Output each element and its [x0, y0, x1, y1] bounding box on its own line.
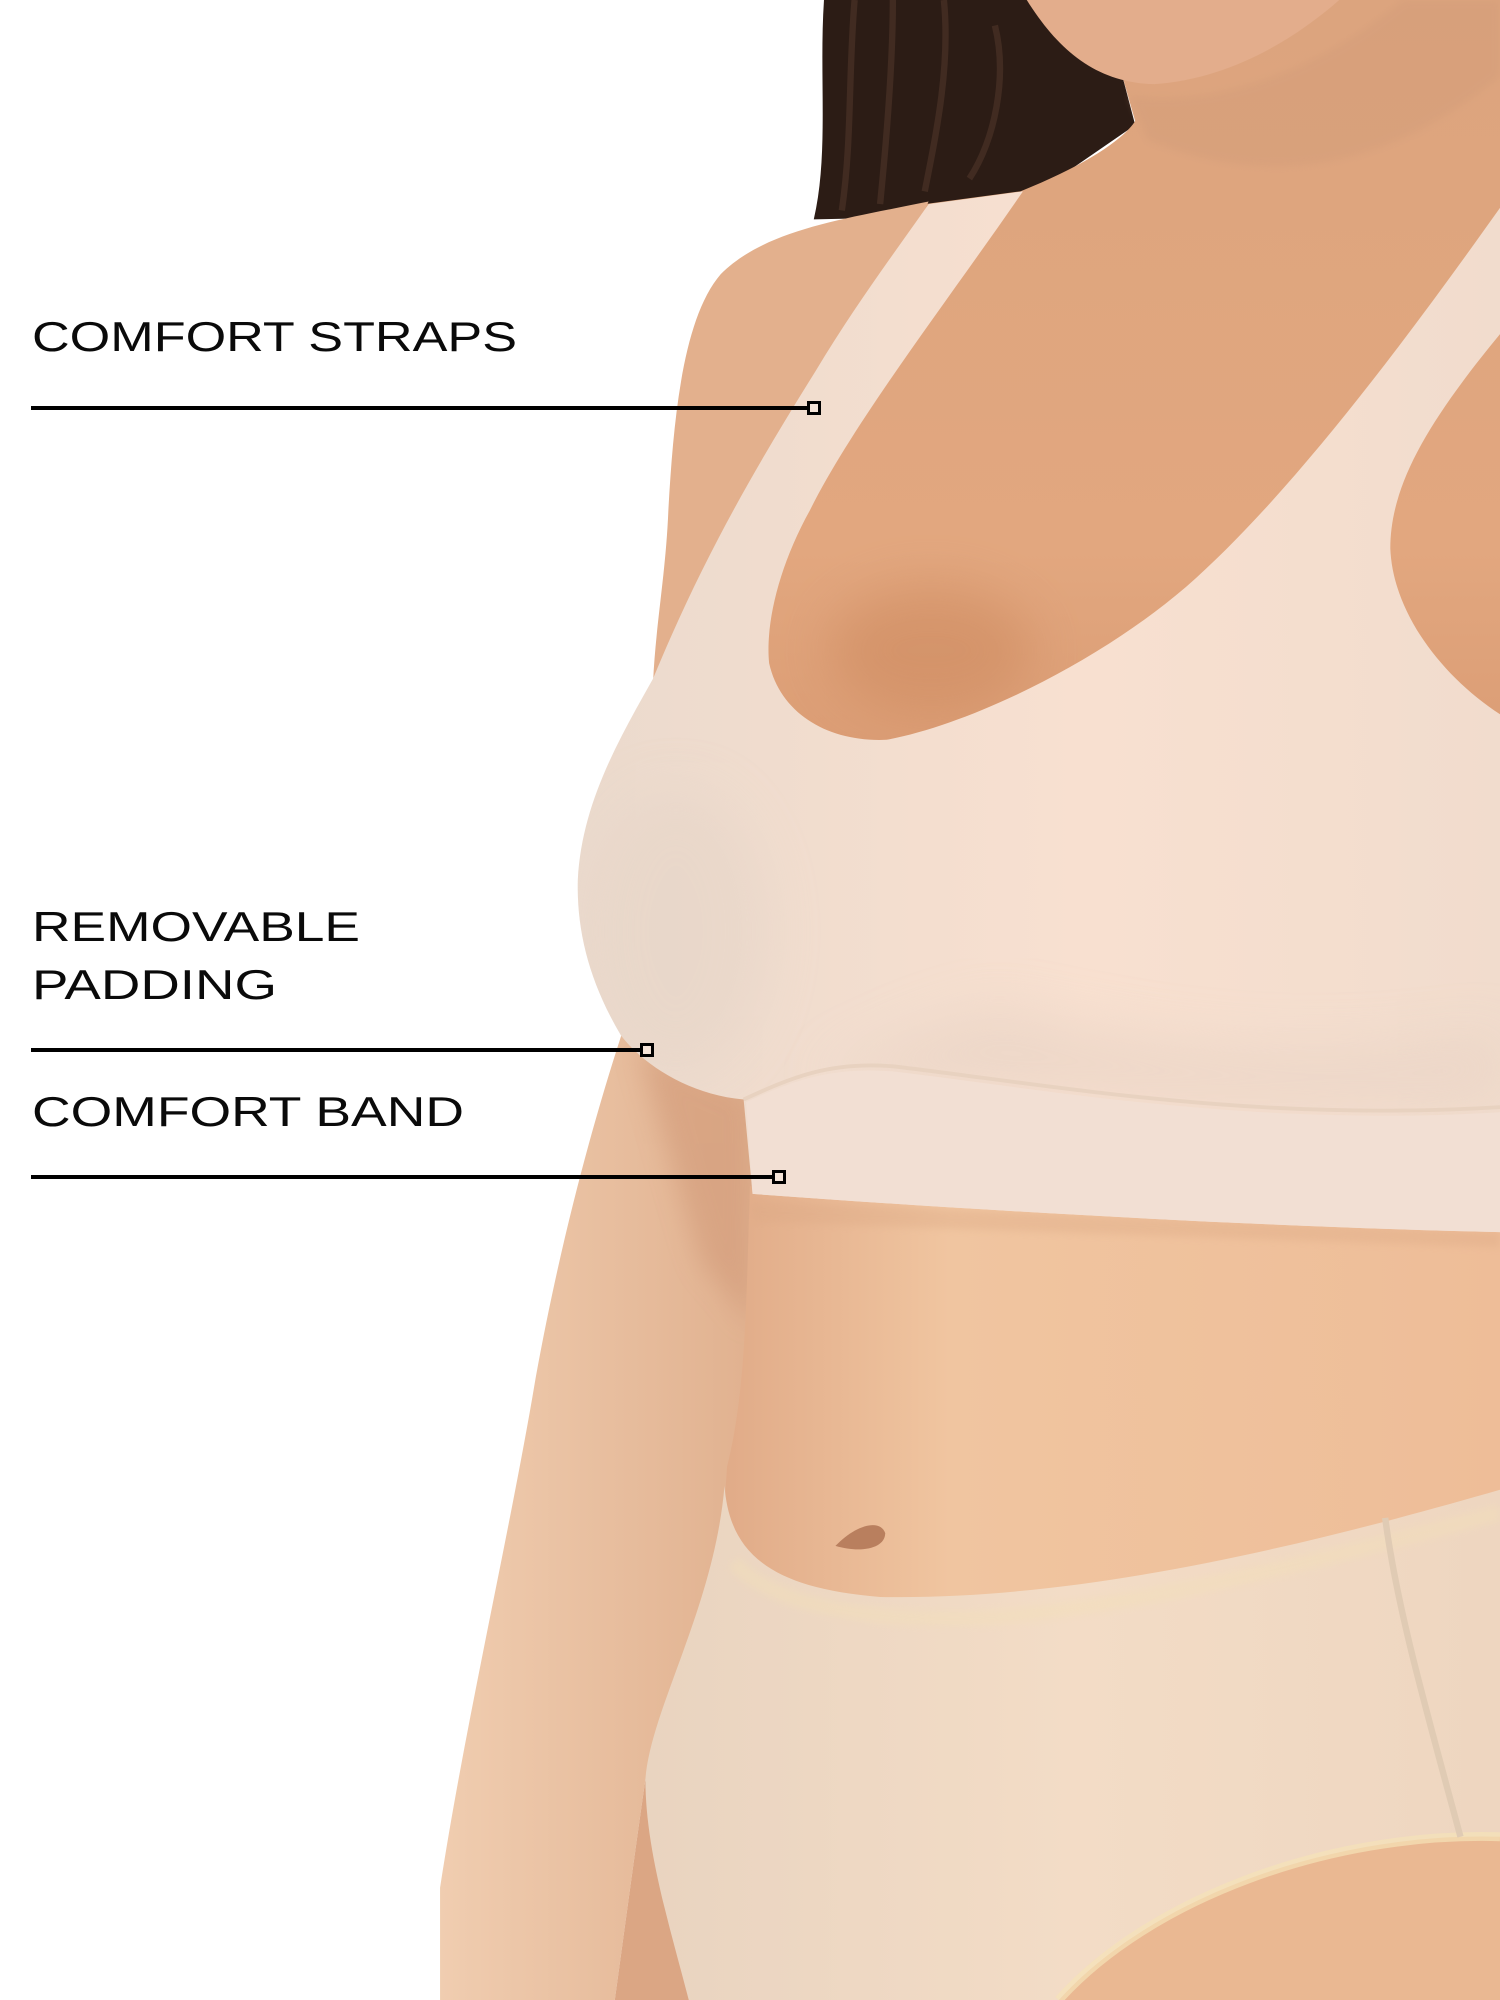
band seam — [744, 1065, 1500, 1111]
chin shadow — [1129, 0, 1500, 166]
callout: removable padding — [31, 903, 652, 1056]
label: COMFORT STRAPS — [32, 313, 517, 360]
cleavage shadow — [829, 587, 1033, 714]
shoulder and upper arm — [653, 202, 929, 682]
lower arm — [440, 1036, 765, 2000]
near thigh — [615, 1779, 714, 2000]
leader line — [31, 406, 809, 410]
underarm shadow — [640, 1058, 751, 1300]
cup shading — [754, 1046, 1500, 1232]
navel — [835, 1525, 885, 1549]
label second line: PADDING — [32, 961, 277, 1008]
leader line — [31, 1175, 773, 1179]
far thigh — [1059, 1832, 1500, 2000]
under-cup shading — [1008, 1046, 1124, 1072]
photo: model wearing bra and briefs — [440, 0, 1500, 2000]
neck and chest skin — [753, 0, 1500, 918]
hair — [814, 0, 1135, 219]
marker — [642, 1044, 652, 1056]
callout: comfort band — [31, 1088, 784, 1182]
torso — [714, 1186, 1500, 1658]
label: REMOVABLE — [32, 903, 360, 950]
face and chin — [1027, 0, 1339, 84]
shadow under band — [750, 1202, 1500, 1247]
marker — [774, 1172, 784, 1182]
bra — [578, 191, 1500, 1232]
briefs leg edge — [1059, 1836, 1500, 2000]
briefs side seam — [1385, 1518, 1460, 1837]
briefs — [645, 1486, 1500, 2000]
label: COMFORT BAND — [32, 1088, 464, 1135]
band — [746, 1070, 1500, 1232]
briefs waist edge — [733, 1513, 1500, 1618]
leader line — [31, 1048, 641, 1052]
marker — [808, 402, 820, 414]
callout: comfort straps — [31, 313, 820, 414]
